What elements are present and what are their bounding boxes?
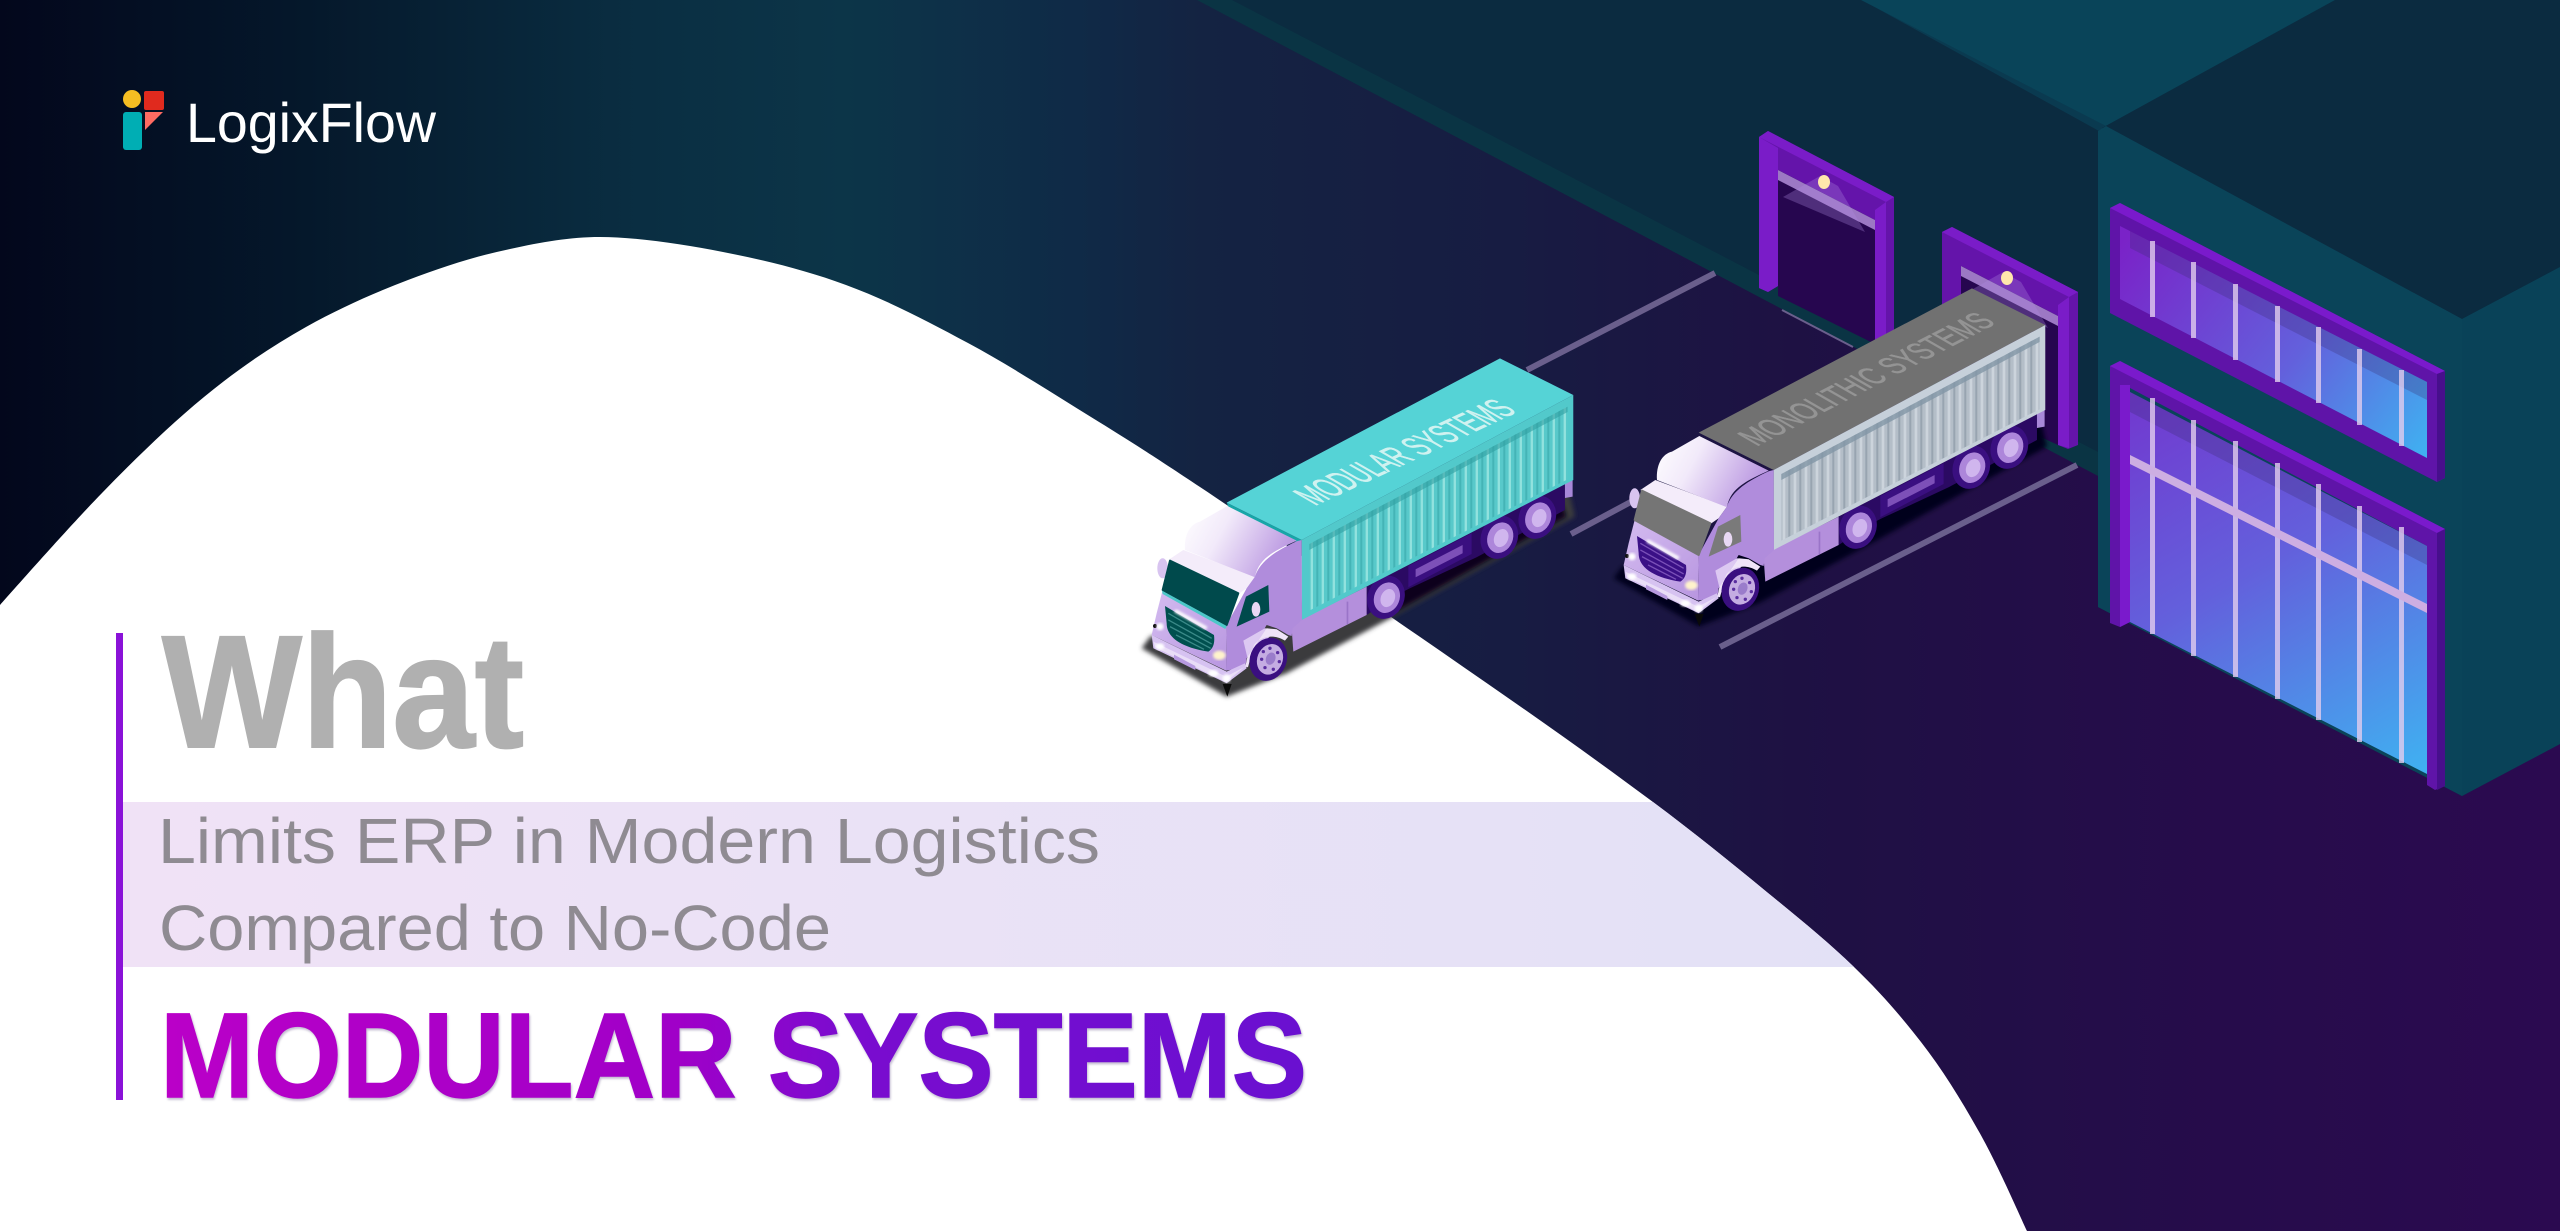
side mirror [1252,602,1260,617]
side window [1709,515,1741,557]
logo wordmark: LogixFlow [186,91,437,154]
subtitle line 2: Compared to No-Code [159,892,831,964]
right wall [2462,267,2560,796]
container label: MONOLITHIC SYSTEMS [1730,308,2004,451]
upper window [2110,203,2445,482]
white curved panel [0,237,2027,1231]
grille [1637,536,1686,582]
front wall [2098,126,2462,796]
truck: modular systems [1142,358,1575,697]
purple accent bar [116,633,123,1100]
lower glass door [2110,361,2445,790]
container label: MODULAR SYSTEMS [1285,394,1526,510]
right side of door [2437,529,2445,790]
grille [1165,606,1214,652]
lilac subtitle band [123,802,1883,967]
loading dock door 1 [1759,131,1894,344]
warehouse side wall [1200,0,2099,476]
building underlay [1861,0,2560,796]
teal container [1227,358,1573,620]
windshield [1635,491,1710,555]
subtitle text [158,805,1100,964]
grey container [1699,288,2045,550]
logo mark [123,90,164,150]
wall base strip [1197,0,2098,476]
windshield [1163,561,1238,625]
roof dark panel [2102,0,2560,319]
side mirror [1724,532,1732,547]
heading: What: What [162,602,524,781]
roof light panel [1861,0,2335,126]
logo [123,90,437,154]
warehouse building [1197,0,2560,796]
loading dock door 2 [1942,227,2078,449]
truck shadow [1614,410,2047,627]
truck: monolithic systems [1614,288,2047,627]
truck shadow [1142,480,1575,697]
heading: MODULAR SYSTEMS: MODULAR SYSTEMS [160,987,1307,1123]
parking lines [1527,273,2077,647]
subtitle line 1: Limits ERP in Modern Logistics [158,805,1100,877]
side window [1237,585,1269,627]
